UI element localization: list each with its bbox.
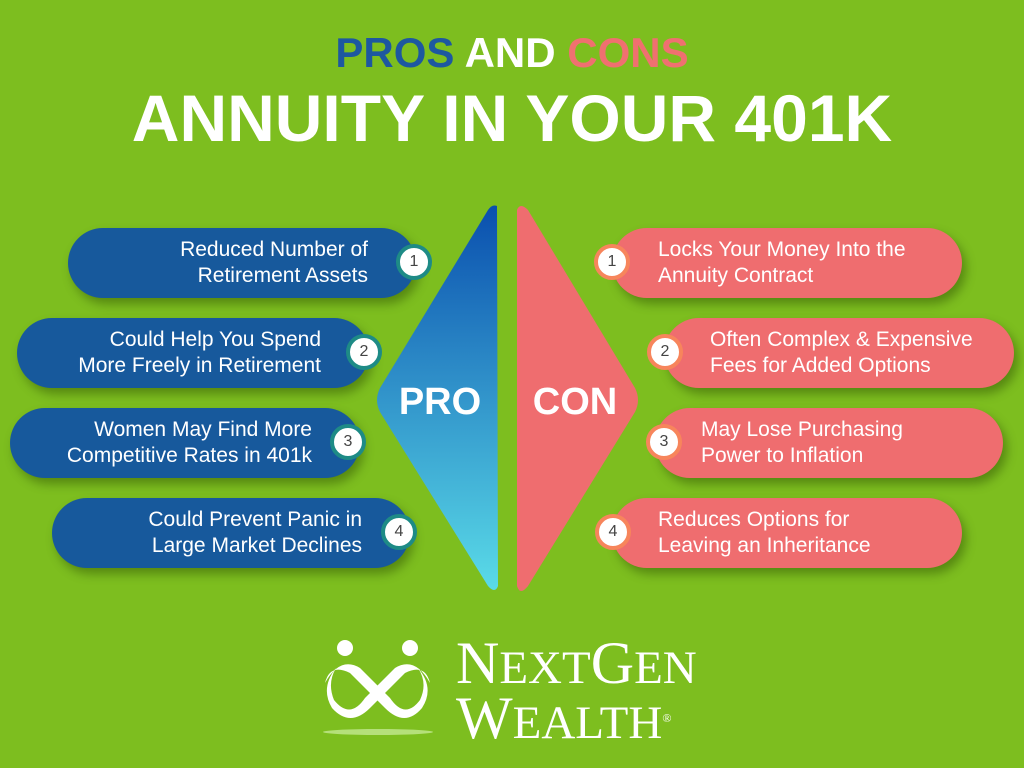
num pro 2 [346, 334, 382, 370]
num con 3 [646, 424, 682, 460]
pro half [377, 206, 498, 590]
logo [323, 630, 697, 751]
num pro 1 [396, 244, 432, 280]
con 1 [612, 228, 962, 298]
con 2: Fees for Added Options [710, 354, 931, 377]
pro 2 [17, 318, 369, 388]
num pro 1: 1 [410, 253, 418, 270]
con 3 [655, 408, 1003, 478]
num con 2: 2 [661, 343, 669, 360]
num con 4: 4 [609, 523, 617, 540]
num con 4 [595, 514, 631, 550]
pro 1: Reduced Number of [180, 238, 368, 261]
con 1: Locks Your Money Into the [658, 238, 906, 261]
pro 4 [52, 498, 410, 568]
pro 4: Large Market Declines [152, 534, 362, 557]
num con 1: 1 [608, 253, 616, 270]
con 1: Annuity Contract [658, 264, 813, 287]
pro 2: Could Help You Spend [110, 328, 321, 351]
pro 4: Could Prevent Panic in [148, 508, 362, 531]
logo text: WEALTH® [456, 685, 671, 751]
num pro 4 [381, 514, 417, 550]
num con 1 [594, 244, 630, 280]
main heading: ANNUITY IN YOUR 401K [132, 81, 892, 155]
pro 3 [10, 408, 360, 478]
pro 1: Retirement Assets [198, 264, 368, 287]
logo text [456, 630, 697, 751]
con half: CON [533, 381, 617, 423]
num pro 3: 3 [344, 433, 352, 450]
pro 3: Women May Find More [94, 418, 312, 441]
con 2: Often Complex & Expensive [710, 328, 973, 351]
con 4 [612, 498, 962, 568]
pro half: PRO [399, 381, 481, 423]
pro 3: Competitive Rates in 401k [67, 444, 312, 467]
num pro 4: 4 [395, 523, 403, 540]
title [132, 29, 892, 155]
logo icon [323, 640, 433, 735]
con 4: Reduces Options for [658, 508, 849, 531]
pro 2: More Freely in Retirement [78, 354, 321, 377]
num pro 3 [330, 424, 366, 460]
con half [517, 206, 638, 591]
con 3: May Lose Purchasing [701, 418, 903, 441]
logo text: NEXTGEN [456, 630, 697, 696]
num pro 2: 2 [360, 343, 368, 360]
con 2 [664, 318, 1014, 388]
num con 2 [647, 334, 683, 370]
con 3: Power to Inflation [701, 444, 863, 467]
con 4: Leaving an Inheritance [658, 534, 870, 557]
num con 3: 3 [660, 433, 668, 450]
pro 1 [68, 228, 416, 298]
subtitle: pros and cons: PROS AND CONS [335, 29, 689, 76]
